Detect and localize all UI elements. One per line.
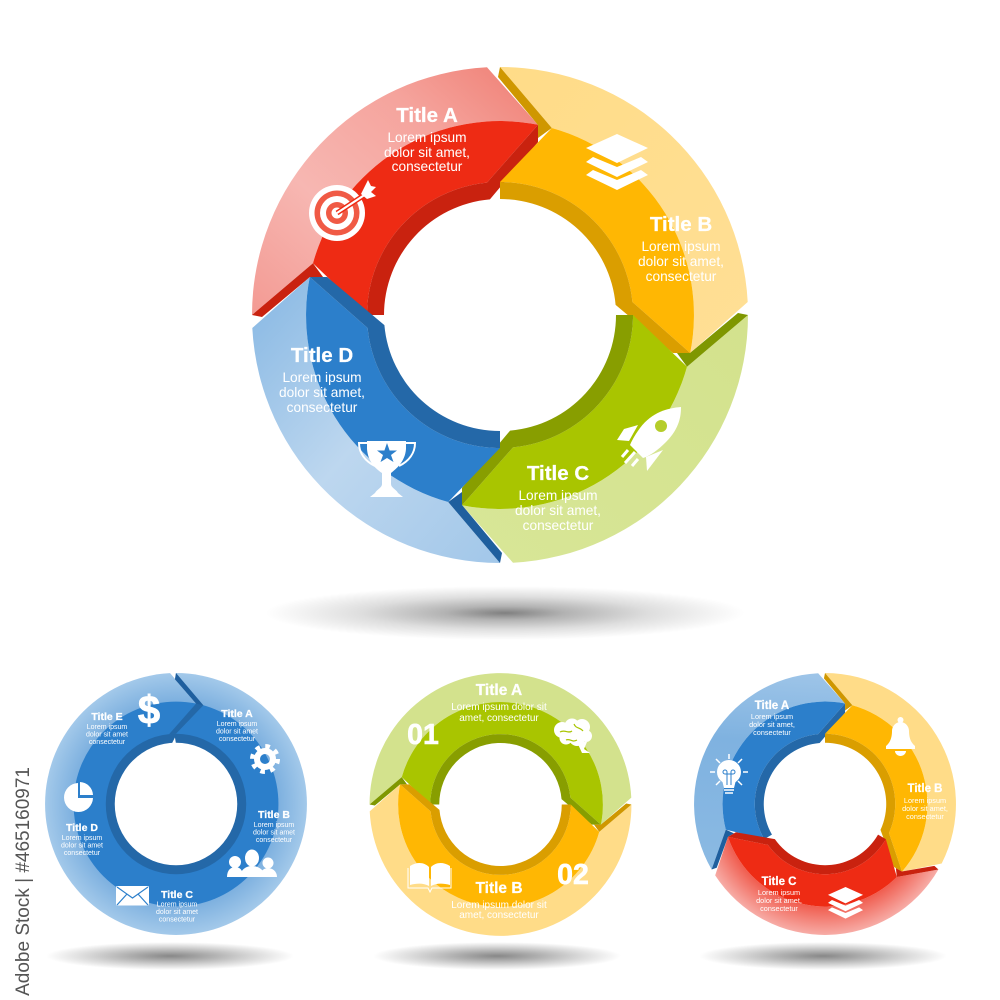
- segment: Title A (red): [252, 67, 538, 317]
- body text: consectetur: [760, 904, 798, 913]
- icon: open book: [408, 863, 451, 892]
- segment: Title A (blue): [646, 657, 884, 870]
- body text: dolor sit amet,: [756, 896, 802, 905]
- shadow: three-arrow chart: [699, 942, 947, 970]
- body text: consectetur: [392, 159, 463, 174]
- icon: pie chart: [64, 782, 93, 812]
- number 01: 01: [407, 719, 439, 751]
- body text: Lorem ipsum dolor sit: [451, 900, 547, 911]
- label: Title E: Lorem ipsum: [87, 724, 127, 731]
- label: Title E: consectetur: [89, 739, 126, 746]
- icon: rocket: [617, 407, 681, 471]
- body text: dolor sit amet,: [384, 145, 470, 160]
- title: Title C: [762, 876, 796, 888]
- body text: Lorem ipsum dolor sit: [451, 702, 547, 713]
- icon: brain: [554, 718, 592, 753]
- body text: Lorem ipsum: [904, 796, 946, 805]
- icon: trophy with star: [359, 441, 415, 497]
- label: Title D: consectetur: [64, 850, 101, 857]
- body text: Lorem ipsum: [518, 488, 598, 503]
- icon: group of people: [227, 850, 277, 877]
- body text: consectetur: [646, 269, 717, 284]
- icon: target with arrow: [309, 180, 376, 241]
- body text: Lorem ipsum: [641, 239, 721, 254]
- body text: consectetur: [523, 518, 594, 533]
- body text: dolor sit amet,: [638, 254, 724, 269]
- title: Title C: [527, 462, 589, 485]
- label: Title B: Title B: [258, 809, 290, 821]
- label: Title A: [216, 708, 258, 743]
- main four-arrow cycle chart: [252, 67, 748, 563]
- small chart: three-arrow cycle: [646, 657, 956, 983]
- label: Title B: consectetur: [256, 837, 293, 844]
- label: Title C: dolor sit amet: [156, 909, 198, 916]
- label: Title C: Title C: [161, 889, 193, 901]
- icon: stacked layers: [828, 887, 863, 919]
- icon: gear: [252, 746, 278, 772]
- title: Title A: [396, 104, 458, 127]
- label: Title B: [253, 809, 295, 844]
- segment: Title C (green): [462, 313, 748, 563]
- body text: amet, consectetur: [459, 713, 539, 724]
- body text: dolor sit amet,: [902, 804, 948, 813]
- shadow: main chart: [265, 586, 745, 640]
- label: Title A: consectetur: [219, 736, 256, 743]
- label: Title E: dolor sit amet: [86, 732, 128, 738]
- label: Title D: dolor sit amet: [61, 842, 103, 850]
- label: Title A: dolor sit amet: [216, 728, 258, 736]
- label: Title B: dolor sit amet: [253, 830, 295, 836]
- label: Title D: Lorem ipsum: [62, 835, 102, 842]
- vertical image id text: Adobe Stock | #465160971: [13, 767, 34, 996]
- body text: Lorem ipsum: [751, 712, 793, 721]
- icon: envelope: [116, 886, 149, 906]
- label: Title C: Lorem ipsum: [157, 902, 197, 908]
- icon: light bulb: [710, 754, 748, 793]
- body text: consectetur: [906, 812, 944, 821]
- body text: dolor sit amet,: [279, 385, 365, 400]
- label: Title E: [86, 711, 128, 746]
- body text: dolor sit amet,: [749, 720, 795, 729]
- title: Title B: [475, 880, 523, 897]
- small chart: two-step green and yellow cycle: [370, 673, 631, 936]
- segment: Title D (blue): [252, 277, 502, 563]
- label: Title B: Lorem ipsum: [254, 822, 294, 829]
- icon: bell: [886, 717, 915, 756]
- segment: Title B (yellow): [370, 784, 631, 936]
- number 02: 02: [557, 859, 589, 891]
- icon: dollar sign: $: [138, 688, 160, 732]
- body text: dolor sit amet,: [515, 503, 601, 518]
- title: Title B: [650, 213, 712, 236]
- segment: Title A (green): [370, 673, 631, 825]
- shadow: blue chart: [46, 942, 294, 970]
- body text: consectetur: [287, 400, 358, 415]
- body text: consectetur: [753, 728, 791, 737]
- body text: Lorem ipsum: [758, 888, 800, 897]
- label: Title A: Lorem ipsum: [217, 721, 257, 728]
- label: Title C: [156, 889, 198, 924]
- label: Title D: [61, 822, 103, 857]
- segment: Title B (yellow): [824, 673, 956, 872]
- label: Title C: consectetur: [159, 916, 196, 924]
- title: Title A: [476, 682, 522, 699]
- body text: Lorem ipsum: [282, 370, 362, 385]
- title: Title D: [291, 344, 353, 367]
- title: Title A: [755, 700, 789, 712]
- label: Title D: Title D: [66, 822, 98, 834]
- segment: Title C (red): [701, 769, 939, 983]
- body text: Lorem ipsum: [387, 130, 467, 145]
- title: Title B: [908, 783, 942, 795]
- ring with arrow seam: [45, 672, 307, 935]
- icon: stacked layers: [586, 134, 648, 190]
- label: Title A: Title A: [221, 708, 253, 720]
- label: Title E: Title E: [91, 711, 123, 723]
- segment: Title B (yellow): [498, 67, 748, 353]
- body text: amet, consectetur: [459, 910, 539, 921]
- shadow: green and yellow chart: [373, 942, 621, 970]
- small chart: five-step blue cycle: [45, 672, 307, 935]
